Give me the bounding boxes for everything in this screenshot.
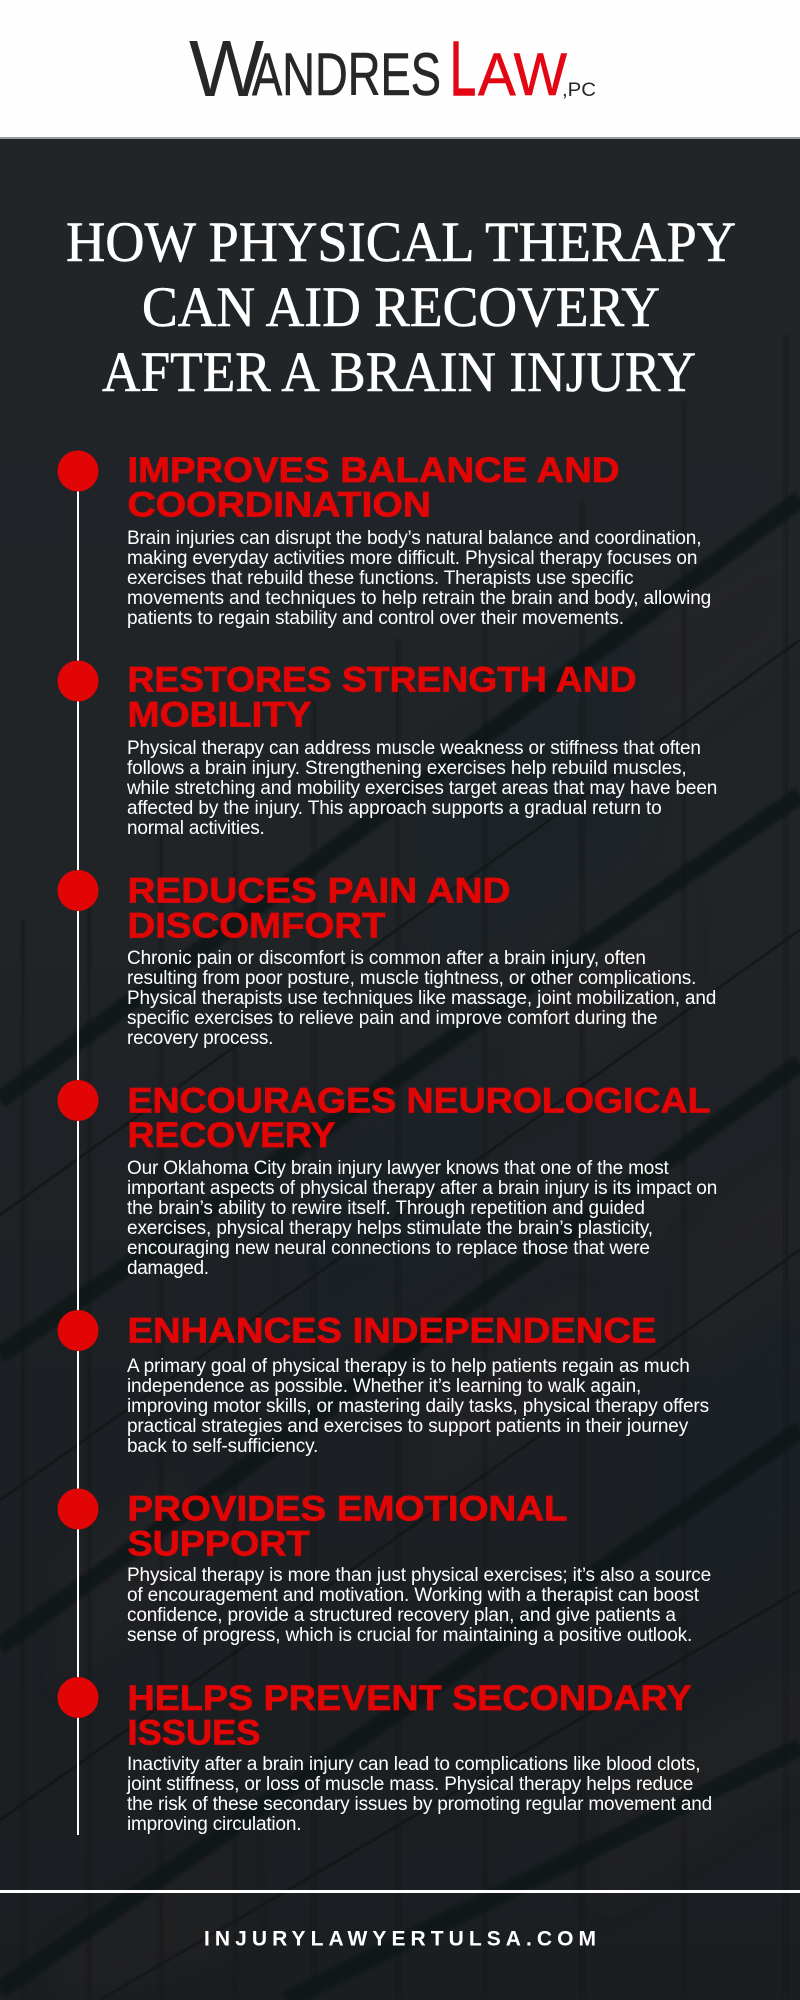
- heading: IMPROVES BALANCE AND: [128, 451, 620, 490]
- heading: ENCOURAGES NEUROLOGICAL: [128, 1081, 710, 1120]
- body text: encouraging new neural connections to replace those that were: [127, 1238, 650, 1259]
- heading: ENHANCES INDEPENDENCE: [128, 1311, 656, 1350]
- section: enhances independence: [58, 1310, 709, 1457]
- body text: while stretching and mobility exercises target areas that may have been: [126, 778, 717, 799]
- body text: Physical therapists use techniques like massage, joint mobilization, and: [127, 988, 716, 1009]
- body text: Physical therapy is more than just physical exercises; it’s also a source: [127, 1565, 711, 1586]
- timeline dot: [58, 450, 98, 492]
- timeline dot: [58, 1488, 98, 1530]
- heading: DISCOMFORT: [128, 906, 386, 945]
- body text: practical strategies and exercises to support patients in their journey: [127, 1416, 689, 1437]
- timeline line: [77, 471, 79, 1835]
- body text: follows a brain injury. Strengthening exercises help rebuild muscles,: [127, 758, 687, 779]
- body text: patients to regain stability and control over their movements.: [127, 608, 624, 629]
- body text: the brain’s ability to rewire itself. Through repetition and guided: [127, 1198, 645, 1219]
- heading: COORDINATION: [128, 486, 431, 524]
- logo: Wandres Law, PC: ,PC: [562, 80, 596, 101]
- heading: RECOVERY: [128, 1116, 336, 1155]
- body text: back to self-sufficiency.: [127, 1436, 318, 1457]
- logo: Wandres Law, PC: AW: [478, 41, 567, 108]
- timeline dot: [58, 870, 98, 911]
- body text: movements and techniques to help retrain the brain and body, allowing: [127, 588, 711, 609]
- body text: making everyday activities more difficult. Physical therapy focuses on: [127, 548, 697, 569]
- logo: Wandres Law, PC: W: [189, 24, 264, 113]
- heading: RESTORES STRENGTH AND: [128, 661, 636, 700]
- body text: Chronic pain or discomfort is common after a brain injury, often: [127, 948, 646, 969]
- body text: Inactivity after a brain injury can lead to complications like blood clots,: [127, 1754, 700, 1775]
- body text: A primary goal of physical therapy is to help patients regain as much: [127, 1356, 690, 1377]
- heading: PROVIDES EMOTIONAL: [128, 1490, 568, 1529]
- title: HOW PHYSICAL THERAPY: [66, 211, 736, 274]
- footer website: INJURYLAWYERTULSA.COM: [204, 1928, 596, 1951]
- body text: the risk of these secondary issues by promoting regular movement and: [127, 1794, 712, 1815]
- body text: affected by the injury. This approach supports a gradual return to: [127, 798, 662, 819]
- body text: joint stiffness, or loss of muscle mass. Physical therapy helps reduce: [126, 1774, 693, 1795]
- header band: [0, 0, 800, 139]
- heading: ISSUES: [128, 1714, 260, 1753]
- heading: [128, 1679, 692, 1753]
- body text: [126, 738, 717, 839]
- section: restores strength and mobility: [58, 660, 717, 839]
- logo: Wandres Law, PC: [189, 24, 596, 113]
- title: AFTER A BRAIN INJURY: [102, 341, 696, 404]
- body text: [127, 948, 716, 1049]
- timeline dot: [58, 1080, 98, 1121]
- body text: of encouragement and motivation. Working with a therapist can boost: [127, 1585, 700, 1606]
- footer divider: [0, 1890, 800, 1893]
- body text: important aspects of physical therapy after a brain injury is its impact on: [127, 1178, 717, 1199]
- body text: [127, 1565, 711, 1646]
- timeline dot: [58, 660, 98, 702]
- body text: independence as possible. Whether it’s learning to walk again,: [127, 1376, 641, 1397]
- heading: SUPPORT: [128, 1525, 310, 1564]
- body text: [126, 1754, 712, 1835]
- heading: [128, 1490, 568, 1564]
- body text: improving motor skills, or mastering daily tasks, physical therapy offers: [127, 1396, 709, 1417]
- title: [66, 211, 736, 404]
- body text: specific exercises to relieve pain and improve comfort during the: [127, 1008, 658, 1029]
- body text: normal activities.: [127, 818, 265, 839]
- body text: [127, 1356, 709, 1457]
- heading: REDUCES PAIN AND: [128, 871, 510, 910]
- body text: Our Oklahoma City brain injury lawyer knows that one of the most: [127, 1158, 670, 1179]
- timeline dot: [58, 1310, 98, 1351]
- body text: [127, 528, 711, 629]
- body text: Physical therapy can address muscle weakness or stiffness that often: [127, 738, 701, 759]
- body text: Brain injuries can disrupt the body’s natural balance and coordination,: [127, 528, 702, 549]
- body text: recovery process.: [127, 1028, 273, 1049]
- body text: sense of progress, which is crucial for maintaining a positive outlook.: [127, 1625, 692, 1646]
- section: improves balance and coordination: [58, 450, 711, 629]
- section: encourages neurological recovery: [58, 1080, 717, 1279]
- logo: Wandres Law, PC: L: [450, 26, 476, 112]
- body text: [127, 1158, 717, 1279]
- heading: MOBILITY: [128, 696, 312, 735]
- timeline dot: [58, 1677, 98, 1718]
- body text: damaged.: [127, 1258, 209, 1279]
- body text: exercises, physical therapy helps stimulate the brain’s plasticity,: [127, 1218, 653, 1239]
- heading: [128, 661, 636, 735]
- body text: confidence, provide a structured recovery plan, and give patients a: [127, 1605, 676, 1626]
- heading: [128, 1081, 710, 1155]
- heading: HELPS PREVENT SECONDARY: [128, 1679, 692, 1718]
- heading: [128, 451, 620, 524]
- logo: Wandres Law, PC: ANDRES: [252, 41, 441, 108]
- title: CAN AID RECOVERY: [142, 276, 660, 339]
- section: provides emotional support: [58, 1488, 711, 1646]
- section: helps prevent secondary issues: [58, 1677, 712, 1835]
- body text: improving circulation.: [127, 1814, 302, 1835]
- heading: [128, 871, 510, 945]
- body text: resulting from poor posture, muscle tightness, or other complications.: [127, 968, 696, 989]
- section: reduces pain and discomfort: [58, 870, 716, 1049]
- body text: exercises that rebuild these functions. Therapists use specific: [127, 568, 634, 589]
